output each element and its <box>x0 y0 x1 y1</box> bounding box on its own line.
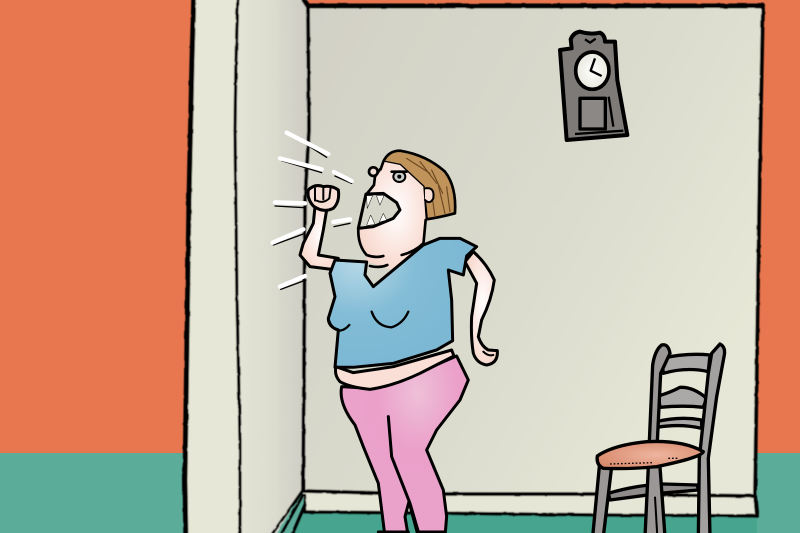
shoes <box>378 527 445 533</box>
raised arm <box>300 207 338 270</box>
front left leg <box>593 467 612 533</box>
chair back slats <box>662 354 710 373</box>
bare belly <box>335 350 454 389</box>
room walls and skirting <box>185 0 763 533</box>
head and neck <box>358 162 434 270</box>
ear <box>425 188 434 202</box>
green floor in room <box>285 512 757 533</box>
clock base <box>575 97 623 134</box>
eye and eyebrow <box>392 171 407 182</box>
clock hands <box>591 58 602 76</box>
second slat <box>658 387 707 407</box>
belly and pink trousers <box>335 350 468 533</box>
seat weave <box>610 458 678 464</box>
t-shirt <box>328 238 477 367</box>
chair stretchers <box>608 484 698 500</box>
chair seat <box>597 441 703 469</box>
front right leg <box>645 467 665 533</box>
clock case <box>560 32 627 140</box>
side wall panel <box>235 0 309 533</box>
right back post and leg <box>698 344 725 533</box>
left wall strip <box>186 0 240 533</box>
wall clock <box>560 32 627 140</box>
clock crest <box>585 39 596 43</box>
clock door <box>580 98 605 129</box>
right arm and hand <box>465 252 497 365</box>
pink trousers <box>341 356 468 533</box>
back wall <box>303 5 763 495</box>
nose <box>369 167 378 176</box>
mouth with teeth <box>358 193 400 228</box>
third slat <box>657 418 702 428</box>
wall outlines <box>185 0 763 533</box>
left back post <box>649 345 670 442</box>
hair <box>383 151 455 219</box>
chair <box>593 344 725 533</box>
skirting board <box>303 491 757 516</box>
raised fist <box>308 186 339 210</box>
motion lines <box>273 133 352 289</box>
inner leg line <box>388 417 418 532</box>
woman <box>273 133 497 367</box>
clock dial <box>576 52 609 89</box>
